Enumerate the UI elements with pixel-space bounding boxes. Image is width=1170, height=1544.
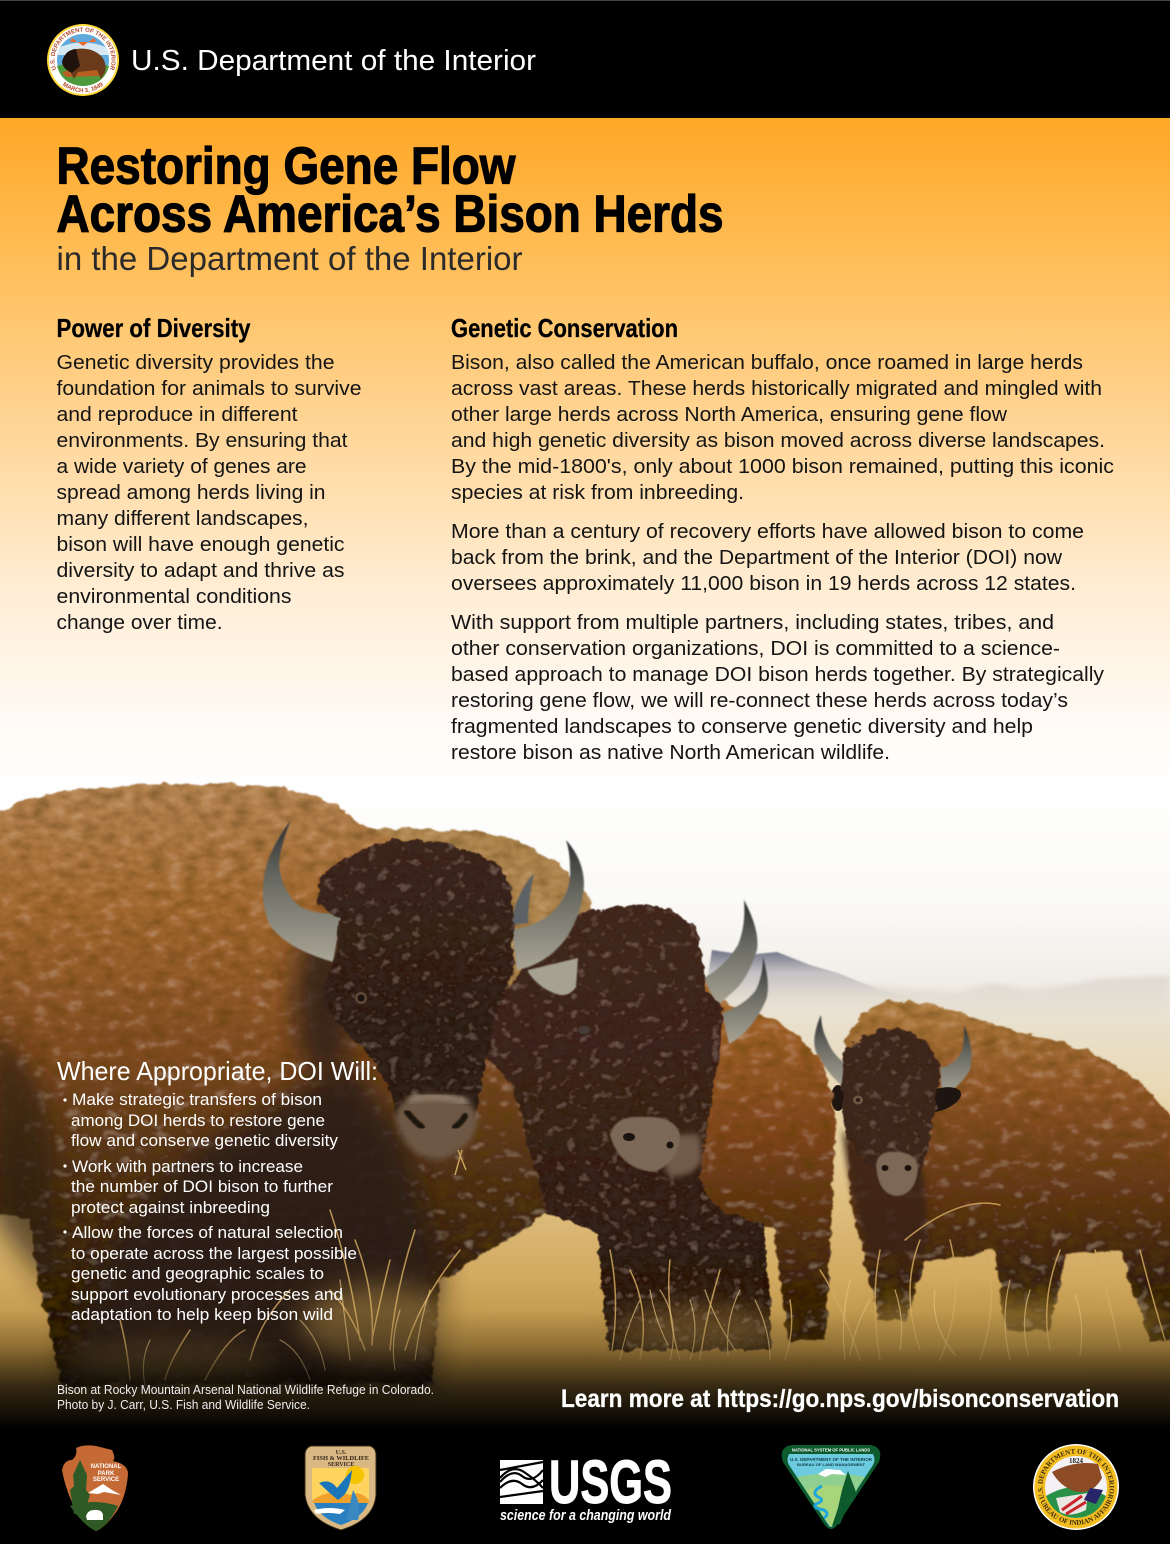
photo caption [57,1383,434,1412]
icon: Bureau of Indian Affairs seal: U.S. DEPARTMENT OF THE INTERIOR [1038,1448,1114,1500]
panel: where appropriate, DOI will [57,1056,378,1324]
bison: behind center [330,829,835,1340]
panel: genetic conservation: fragmented landscapes to conserve genetic diversity and help [451,715,1033,738]
icon: National Park Service arrowhead [62,1445,128,1531]
panel: power of diversity: Power of Diversity [56,313,251,343]
golden grass over the legs [60,1285,1170,1387]
panel: where appropriate, DOI will: flow and conserve genetic diversity [71,1131,338,1150]
photo caption: Photo by J. Carr, U.S. Fish and Wildlife Service. [57,1398,310,1412]
panel: where appropriate, DOI will: protect against inbreeding [71,1198,270,1217]
panel: genetic conservation: restoring gene flow, we will re-connect these herds across today’s [451,689,1068,712]
photo caption: Bison at Rocky Mountain Arsenal National Wildlife Refuge in Colorado. [57,1383,434,1397]
icon: Bureau of Indian Affairs seal: BUREAU OF INDIAN AFFAIRS [1041,1499,1112,1525]
panel: where appropriate, DOI will: Where Appropriate, DOI Will: [57,1056,378,1086]
panel: genetic conservation: species at risk from inbreeding. [451,481,744,504]
panel: genetic conservation: By the mid-1800's, only about 1000 bison remained, putting this iconic [451,455,1114,478]
learn more link: Learn more at https://go.nps.gov/bisonconservation [561,1385,1119,1413]
panel: genetic conservation: restore bison as native North American wildlife. [451,741,890,764]
panel: power of diversity: spread among herds living in [56,481,326,504]
panel: power of diversity [56,313,362,634]
bison: large foreground [0,783,584,1385]
title: Restoring Gene Flow [56,138,516,196]
icon: Bureau of Land Management triangle: BUREAU OF LAND MANAGEMENT [797,1462,866,1467]
panel: where appropriate, DOI will: adaptation to help keep bison wild [71,1305,333,1324]
icon: National Park Service arrowhead: SERVICE [93,1477,119,1483]
panel: where appropriate, DOI will: Make strategic transfers of bison [72,1090,322,1109]
icon: Fish and Wildlife Service shield [305,1446,376,1530]
icon: Department of the Interior seal: MARCH 3, 1849 [62,82,103,93]
icon: National Park Service arrowhead: NATIONAL [91,1464,122,1470]
title: in the Department of the Interior [56,240,523,277]
panel: genetic conservation: other conservation organizations, DOI is committed to a science- [451,637,1060,660]
panel: power of diversity: and reproduce in different [56,403,298,426]
title [56,138,724,277]
header band [0,0,1170,96]
title: Across America’s Bison Herds [56,186,724,244]
panel: where appropriate, DOI will: support evolutionary processes and [71,1285,343,1304]
icon: Fish and Wildlife Service shield: U.S. [336,1450,347,1456]
photo: bison on the prairie [0,780,1170,1440]
page gradient background [0,118,1170,1118]
panel: power of diversity: bison will have enough genetic [56,533,344,556]
panel: genetic conservation: across vast areas. These herds historically migrated and mingled with [451,377,1102,400]
panel: genetic conservation: back from the brink, and the Department of the Interior (DOI) now [451,546,1062,569]
panel: where appropriate, DOI will: genetic and geographic scales to [71,1264,324,1283]
icon: Bureau of Land Management triangle: NATIONAL SYSTEM OF PUBLIC LANDS [792,1448,870,1452]
panel: power of diversity: change over time. [56,611,222,634]
panel: power of diversity: a wide variety of genes are [56,455,306,478]
icon: Department of the Interior seal: U.S. DEPARTMENT OF THE INTERIOR [50,28,116,70]
panel: genetic conservation: other large herds across North America, ensuring gene flow [451,403,1007,426]
panel: genetic conservation: and high genetic diversity as bison moved across diverse landscapes. [451,429,1105,452]
panel: power of diversity: diversity to adapt and thrive as [56,559,344,582]
panel: where appropriate, DOI will: Allow the forces of natural selection [72,1223,343,1242]
bison: far right [814,1001,1170,1340]
panel: where appropriate, DOI will: among DOI herds to restore gene [71,1111,325,1130]
icon: Bureau of Land Management triangle [782,1445,880,1529]
icon: Department of the Interior seal [47,24,119,96]
panel: genetic conservation: oversees approximately 11,000 bison in 19 herds across 12 states. [451,572,1076,595]
icon: USGS logo: science for a changing world [500,1507,672,1524]
icon: USGS logo: USGS [549,1448,672,1516]
panel: where appropriate, DOI will: to operate across the largest possible [71,1244,357,1263]
icon: Fish and Wildlife Service shield: FISH & WILDLIFE [313,1456,369,1462]
panel: power of diversity: environments. By ensuring that [56,429,348,452]
icon: USGS logo [500,1448,672,1524]
panel: power of diversity: many different landscapes, [56,507,308,530]
dried grass [120,1203,1165,1385]
icon: Bureau of Land Management triangle: U.S. DEPARTMENT OF THE INTERIOR [790,1457,872,1463]
panel: where appropriate, DOI will: the number of DOI bison to further [71,1177,333,1196]
bison: center [480,900,770,1350]
footer band [0,1430,1170,1544]
fade to black [0,1310,1170,1440]
panel: genetic conservation: With support from multiple partners, including states, tribes, and [451,611,1054,634]
icon: National Park Service arrowhead: PARK [98,1471,115,1477]
panel: genetic conservation: Bison, also called the American buffalo, once roamed in large herds [451,351,1083,374]
panel: genetic conservation: based approach to manage DOI bison herds together. By strategically [451,663,1105,686]
panel: genetic conservation: Genetic Conservation [451,313,678,343]
panel: genetic conservation: More than a century of recovery efforts have allowed bison to come [451,520,1084,543]
department name: U.S. Department of the Interior [131,45,536,77]
panel: where appropriate, DOI will: Work with partners to increase [72,1157,303,1176]
panel: power of diversity: foundation for animals to survive [56,377,362,400]
panel: genetic conservation [451,313,1114,764]
icon: Fish and Wildlife Service shield: SERVICE [328,1462,354,1468]
icon: Bureau of Indian Affairs seal: 1824 [1069,1457,1084,1465]
panel: power of diversity: environmental conditions [56,585,292,608]
panel: power of diversity: Genetic diversity provides the [56,351,334,374]
